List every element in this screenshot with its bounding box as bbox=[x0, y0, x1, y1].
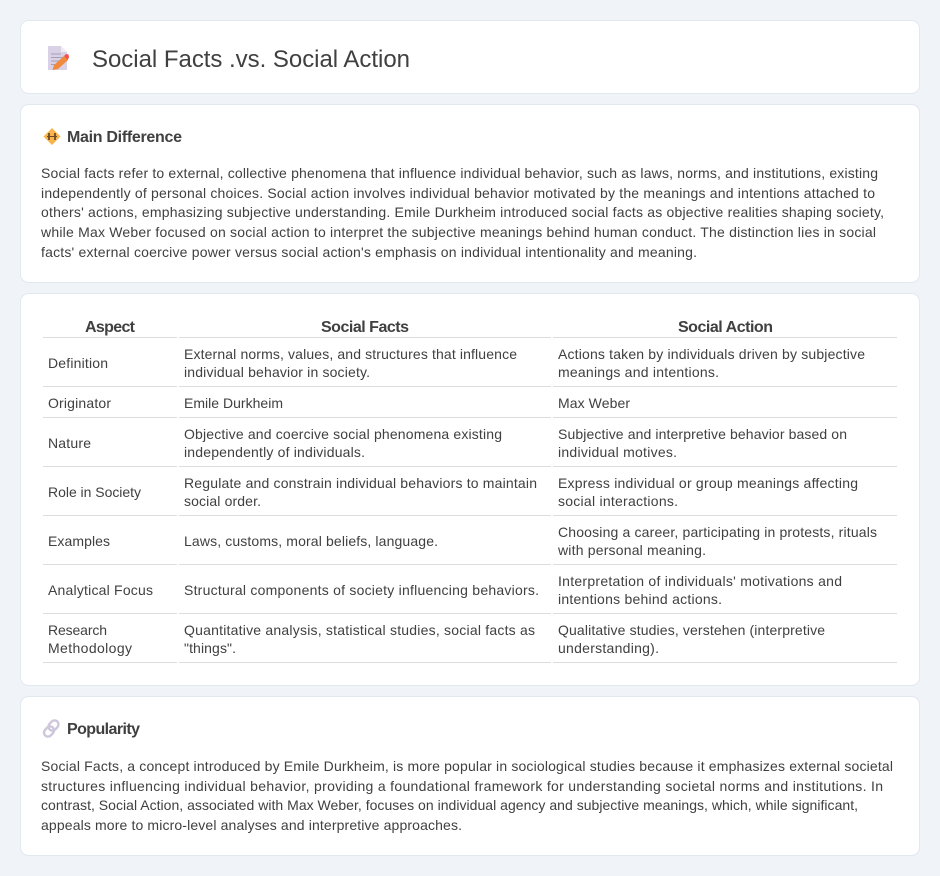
row: definition: Definition bbox=[48, 355, 108, 371]
row: role in society: Role in Society bbox=[48, 484, 141, 500]
row: role in society: social interactions. bbox=[558, 493, 678, 509]
row: analytical focus: Structural components of society influencing behaviors. bbox=[184, 582, 539, 598]
title: Social Facts .vs. Social Action bbox=[92, 46, 410, 73]
row: examples: Choosing a career, participating in protests, rituals bbox=[558, 524, 877, 540]
row: nature: independently of individuals. bbox=[184, 444, 365, 460]
table header: Social Facts bbox=[321, 319, 409, 336]
row: definition: Actions taken by individuals driven by subjective bbox=[558, 346, 865, 362]
text block: main difference paragraph: independently of personal choices. Social action involves individual behavior motivated by the meanings and intentions attached to bbox=[41, 185, 875, 201]
row: role in society bbox=[48, 475, 858, 509]
row: originator: Originator bbox=[48, 395, 111, 411]
row: originator: Emile Durkheim bbox=[184, 395, 283, 411]
heading: main difference: Main Difference bbox=[67, 129, 182, 146]
row: definition: External norms, values, and structures that influence bbox=[184, 346, 517, 362]
row: nature bbox=[48, 426, 847, 460]
text block: popularity paragraph: contrast, Social Action, associated with Max Weber, focuses on individual agency and subjective meanings, which, while significant, bbox=[41, 797, 858, 813]
row: research methodology: Quantitative analysis, statistical studies, social facts as bbox=[184, 622, 535, 638]
table header: Social Action bbox=[678, 319, 773, 336]
row: research methodology: Methodology bbox=[48, 640, 132, 656]
icon: document with pencil bbox=[48, 46, 69, 70]
row: research methodology: "things". bbox=[184, 640, 236, 656]
row: nature: Subjective and interpretive behavior based on bbox=[558, 426, 847, 442]
row: research methodology: Qualitative studies, verstehen (interpretive bbox=[558, 622, 825, 638]
row: nature: individual motives. bbox=[558, 444, 677, 460]
text block: main difference paragraph: facts' external coercive power versus social action's emphasis on individual intentionality and meaning. bbox=[41, 244, 697, 260]
row: analytical focus bbox=[48, 573, 842, 607]
row: research methodology: Research bbox=[48, 622, 107, 638]
table header bbox=[85, 319, 773, 336]
row: definition bbox=[48, 346, 865, 380]
panel: title card bbox=[20, 20, 920, 94]
row: originator bbox=[48, 395, 630, 411]
row: role in society: Express individual or group meanings affecting bbox=[558, 475, 858, 491]
row: analytical focus: Analytical Focus bbox=[48, 582, 153, 598]
row: examples: Examples bbox=[48, 533, 110, 549]
row: role in society: Regulate and constrain individual behaviors to maintain bbox=[184, 475, 537, 491]
row: research methodology: understanding). bbox=[558, 640, 659, 656]
row: nature: Objective and coercive social phenomena existing bbox=[184, 426, 502, 442]
text block: main difference paragraph bbox=[40, 165, 884, 260]
icon: link bbox=[42, 719, 60, 738]
text block: main difference paragraph: Social facts refer to external, collective phenomena that influence individual behavior, such as laws, norms, and institutions, existing bbox=[41, 165, 878, 181]
row: definition: meanings and intentions. bbox=[558, 364, 719, 380]
panel: popularity bbox=[20, 696, 920, 856]
icon: orange diamond bbox=[44, 128, 60, 145]
row: originator: Max Weber bbox=[558, 395, 630, 411]
text block: popularity paragraph: Social Facts, a concept introduced by Emile Durkheim, is more popular in sociological studies because it emphasizes external societal bbox=[41, 758, 893, 774]
row: nature: Nature bbox=[48, 435, 91, 451]
table header: Aspect bbox=[85, 319, 136, 336]
row: examples bbox=[48, 524, 877, 558]
row: analytical focus: intentions behind actions. bbox=[558, 591, 722, 607]
text block: popularity paragraph bbox=[41, 758, 893, 833]
panel: main difference bbox=[20, 104, 920, 282]
panel: comparison table bbox=[20, 294, 920, 686]
text block: popularity paragraph: structures influencing individual behavior, providing a foundational framework for understanding societal norms and institutions. In bbox=[41, 778, 883, 794]
text block: popularity paragraph: appeals more to micro-level analyses and interpretive approaches. bbox=[41, 817, 462, 833]
row: examples: Laws, customs, moral beliefs, language. bbox=[184, 533, 438, 549]
row: definition: individual behavior in society. bbox=[184, 364, 370, 380]
text block: main difference paragraph: while Max Weber focused on social action to interpret the subjective meanings behind human conduct. The distinction lies in social bbox=[40, 224, 876, 240]
row: analytical focus: Interpretation of individuals' motivations and bbox=[558, 573, 842, 589]
row: role in society: social order. bbox=[184, 493, 261, 509]
heading: popularity: Popularity bbox=[67, 721, 140, 738]
row: examples: with personal meaning. bbox=[557, 542, 706, 558]
row: research methodology bbox=[48, 622, 825, 656]
text block: main difference paragraph: others' actions, emphasizing subjective understanding. Emile Durkheim introduced social facts as objective realities shaping society, bbox=[41, 204, 884, 220]
